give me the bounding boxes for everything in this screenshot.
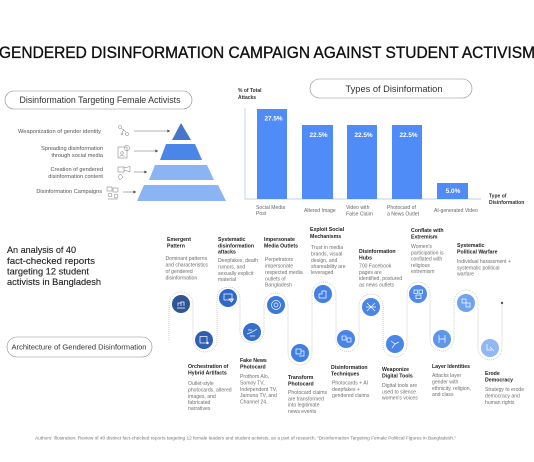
step text: transform photocard: are transformed	[288, 396, 324, 402]
step text: fake news photocard: Independent TV,	[240, 387, 277, 393]
pyramid labels: through social media	[51, 153, 104, 159]
x axis labels: Altered Image	[304, 208, 336, 214]
step text: weaponize digital tools: Digital Tools	[382, 374, 413, 380]
node: disinformation techniques	[337, 330, 355, 348]
step text: orchestration of hybrid artifacts: images, and	[188, 394, 216, 400]
step text: erode democracy: human rights	[485, 400, 515, 406]
step text: erode democracy: Strategy to erode	[485, 387, 524, 393]
y axis title: % of Total	[238, 88, 262, 94]
step text: transform photocard: Photocard	[288, 382, 314, 388]
x axis labels: Video with	[346, 205, 370, 211]
panel: types of disinformation	[238, 79, 524, 218]
x axis labels	[256, 205, 478, 218]
step text: transform photocard: news events	[288, 409, 317, 415]
bar: altered image: 22.5%	[309, 132, 328, 139]
node: impersonate media outlets	[267, 296, 285, 314]
step text: systematic political warfare: Individual harassment +	[457, 259, 511, 265]
dotted serpentine path	[169, 282, 502, 365]
step text: systematic political warfare	[457, 243, 511, 278]
pyramid labels: Weaponization of gender identity	[18, 129, 101, 135]
pyramid labels: disinformation content	[48, 174, 103, 180]
step text: orchestration of hybrid artifacts	[188, 364, 232, 412]
step text: impersonate media outlets: Impersonate	[264, 237, 295, 243]
step text: exploit social mechanisms: Trust in media	[311, 245, 343, 251]
pyramid labels: Creation of gendered	[50, 167, 103, 173]
step text: emergent pattern: Pattern	[167, 244, 185, 250]
step text: transform photocard	[288, 375, 328, 415]
step text: disinformation hubs: identified, postured	[359, 276, 402, 282]
bar: photocard of a news outlet: 22.5%	[399, 132, 418, 139]
step text: conflate with extremism: extremism	[411, 269, 434, 275]
bar: ai-generated video: 5.0%	[446, 188, 461, 195]
step text: weaponize digital tools: Digital tools are	[382, 383, 417, 389]
step text: layer identities: Attacks layer	[432, 373, 461, 379]
step text: emergent pattern	[166, 237, 208, 282]
y axis title: Attacks	[238, 95, 256, 101]
heading pill: architecture: Architecture of Gendered Disinformation	[12, 342, 146, 352]
step text: disinformation hubs: 700 Facebook	[359, 264, 392, 270]
step text: transform photocard: Transform	[288, 375, 314, 381]
node: fake news photocard	[243, 323, 261, 341]
step text: impersonate media outlets: outlets of	[265, 276, 286, 282]
step text: layer identities: Layer Identities	[432, 364, 470, 370]
pyramid labels	[18, 129, 104, 195]
step text: systematic disinformation attacks: disinformation	[218, 244, 254, 250]
step text: layer identities: and class	[432, 392, 454, 398]
step text: transform photocard: into legitimate	[288, 402, 320, 408]
step text: erode democracy: Erode	[485, 371, 500, 377]
node: disinformation hubs	[362, 298, 380, 316]
x axis labels: a News Outlet	[387, 212, 420, 218]
bar chart	[257, 109, 468, 199]
x axis title: Type of	[489, 194, 507, 200]
step text: disinformation hubs: as news outlets	[359, 282, 395, 288]
step text: orchestration of hybrid artifacts: Orchestration of	[188, 364, 229, 370]
step text: orchestration of hybrid artifacts: narratives	[188, 406, 211, 412]
step text: disinformation techniques: Disinformation	[331, 365, 368, 371]
node: orchestration of hybrid artifacts	[195, 331, 213, 349]
step text: conflate with extremism: Conflate with	[411, 228, 444, 234]
x axis labels: Photocard of	[387, 205, 416, 211]
timeline: architecture of gendered disinformation	[166, 227, 524, 415]
step text: conflate with extremism: conflated with	[411, 256, 442, 262]
icon: gender identity	[118, 126, 129, 136]
step text: exploit social mechanisms: shareability are	[311, 264, 346, 270]
step text: emergent pattern: disinformation	[166, 276, 197, 282]
pyramid labels: Spreading disinformation	[41, 146, 103, 152]
step text: systematic disinformation attacks: sexually explicit	[218, 271, 254, 277]
step text: impersonate media outlets: Perpetrators	[265, 257, 293, 263]
text block: analysis summary: An analysis of 40	[7, 245, 76, 255]
step text: weaponize digital tools: Weaponize	[382, 367, 409, 373]
step text: fake news photocard: Somoy TV,	[240, 380, 265, 386]
text block: analysis summary: targeting 12 student	[7, 266, 90, 276]
step text: fake news photocard: Channel 24.	[240, 400, 267, 406]
step text: erode democracy: Democracy	[485, 378, 513, 384]
step text: impersonate media outlets	[264, 237, 303, 288]
step text: erode democracy: democracy and	[485, 394, 520, 400]
node: erode democracy	[481, 339, 499, 357]
step text: exploit social mechanisms	[310, 227, 346, 276]
pyramid labels: Disinformation Campaigns	[36, 189, 102, 195]
node: emergent pattern	[172, 295, 190, 313]
step text: emergent pattern: Dominant patterns	[166, 256, 208, 262]
step text: disinformation hubs: Hubs	[359, 256, 372, 262]
bar: social media post: 27.5%	[264, 116, 283, 122]
step text: exploit social mechanisms: Mechanisms	[310, 234, 341, 240]
node: systematic disinformation attacks	[219, 289, 237, 307]
step text: orchestration of hybrid artifacts: Hybrid Artifacts	[188, 370, 227, 376]
bar: video with false claim: 22.5%	[354, 132, 373, 139]
step text: impersonate media outlets: impersonate	[265, 264, 293, 270]
heading pill: female activists	[5, 91, 192, 109]
step text: impersonate media outlets: Bangladesh	[265, 282, 292, 288]
bar: altered image	[302, 125, 333, 199]
bar: social media post	[257, 109, 287, 199]
step text: conflate with extremism: participation is	[411, 250, 444, 256]
step text: systematic disinformation attacks: Systematic	[218, 237, 246, 243]
step text: systematic disinformation attacks	[218, 237, 258, 283]
node: transform photocard	[291, 344, 309, 362]
end dot	[501, 302, 503, 304]
x axis labels: Social Media	[256, 205, 285, 211]
icon: campaigns	[107, 187, 118, 199]
heading pill: architecture	[7, 337, 152, 357]
step text: transform photocard: Photocard claims	[288, 390, 328, 396]
step text: erode democracy	[485, 371, 524, 406]
step text: systematic political warfare: warfare	[457, 272, 474, 278]
step text: exploit social mechanisms: design, and	[311, 258, 338, 264]
node: weaponize digital tools	[386, 335, 404, 353]
step text: orchestration of hybrid artifacts: fabricated	[188, 400, 211, 406]
heading pill: types	[310, 79, 472, 98]
step text: systematic disinformation attacks: material	[218, 277, 236, 283]
step text: orchestration of hybrid artifacts: photocards, altered	[188, 388, 232, 394]
x axis labels: Post	[256, 211, 267, 217]
text block: analysis summary	[7, 245, 101, 287]
step text: emergent pattern: Emergent	[167, 237, 191, 243]
pyramid chart	[137, 123, 226, 201]
bar: video with false claim	[347, 125, 377, 199]
step text: exploit social mechanisms: leveraged	[311, 270, 334, 276]
step text: fake news photocard: Fake News	[240, 358, 267, 364]
step text: systematic disinformation attacks: rumors, and	[218, 264, 245, 270]
step text: conflate with extremism: Women's	[411, 244, 432, 250]
step text: disinformation techniques	[331, 365, 370, 399]
step text: fake news photocard: Photocard	[240, 364, 266, 370]
step text: systematic political warfare: Systematic	[457, 243, 485, 249]
bar: ai-generated video	[437, 183, 468, 199]
step text: fake news photocard: Jamuna TV, and	[240, 393, 277, 399]
step text: disinformation hubs: Disinformation	[359, 249, 396, 255]
step text: conflate with extremism	[411, 228, 444, 275]
heading pill: types: Types of Disinformation	[346, 84, 442, 94]
step text: disinformation hubs	[359, 249, 402, 288]
step text: orchestration of hybrid artifacts: Outlet-style	[188, 381, 214, 387]
step text: systematic political warfare: systematic political	[457, 266, 499, 272]
source note: Authors' Illustration: Review of 40 distinct fact-checked reports targeting 12 female leaders and student activists, as a part of research, "Disinformation Targeting Female Political Figures in Bangladesh."	[35, 436, 456, 440]
step text: disinformation techniques: gendered claims	[332, 393, 370, 399]
step text: systematic disinformation attacks: Deepfakes, death	[218, 258, 258, 264]
step text: impersonate media outlets: Media Outlets	[264, 244, 298, 250]
step text: exploit social mechanisms: brands, visual	[311, 252, 342, 258]
step text: layer identities	[432, 364, 471, 398]
step text: weaponize digital tools	[382, 367, 418, 402]
x axis labels: AI-generated Video	[434, 208, 478, 214]
step text: fake news photocard	[240, 358, 277, 406]
icon: social media	[118, 145, 130, 158]
step text: conflate with extremism: religious	[411, 263, 430, 269]
node: layer identities	[433, 330, 451, 348]
node: conflate with extremism	[409, 285, 427, 303]
text block: analysis summary: activists in Bangladesh	[7, 277, 101, 287]
step text: layer identities: gender with	[432, 380, 459, 386]
step text: weaponize digital tools: women's voices	[382, 396, 418, 402]
node: exploit social mechanisms	[314, 285, 332, 303]
step text: impersonate media outlets: respected media	[265, 270, 303, 276]
x axis title: Disinformation	[489, 200, 524, 206]
node: systematic political warfare	[457, 294, 475, 312]
axes	[245, 108, 481, 199]
bar: photocard of a news outlet	[392, 125, 422, 199]
step text: disinformation techniques: Photocards + AI	[332, 380, 368, 386]
step text: disinformation techniques: Techniques	[331, 372, 360, 378]
x axis labels: False Claim	[346, 212, 373, 218]
panel: disinformation targeting female activists	[5, 91, 226, 201]
step text: fake news photocard: Prothom Alo,	[240, 374, 269, 380]
step text: emergent pattern: of gendered	[166, 269, 193, 275]
icon: content creation	[118, 166, 130, 180]
step text: systematic disinformation attacks: attacks	[218, 250, 236, 256]
heading pill: female activists: Disinformation Targeting Female Activists	[20, 95, 181, 105]
step text: weaponize digital tools: used to silence	[382, 390, 416, 396]
step text: layer identities: ethnicity, religion,	[432, 386, 471, 392]
step text: disinformation techniques: deepfakes +	[332, 387, 360, 393]
step text: conflate with extremism: Extremism	[411, 234, 438, 240]
step text: emergent pattern: and characteristics	[166, 262, 208, 268]
step text: disinformation hubs: pages are	[359, 270, 382, 276]
step text: systematic political warfare: Political Warfare	[457, 250, 498, 256]
step text: exploit social mechanisms: Exploit Social	[310, 227, 345, 233]
arrows to pyramid	[123, 130, 170, 193]
text block: analysis summary: fact-checked reports	[7, 256, 96, 266]
